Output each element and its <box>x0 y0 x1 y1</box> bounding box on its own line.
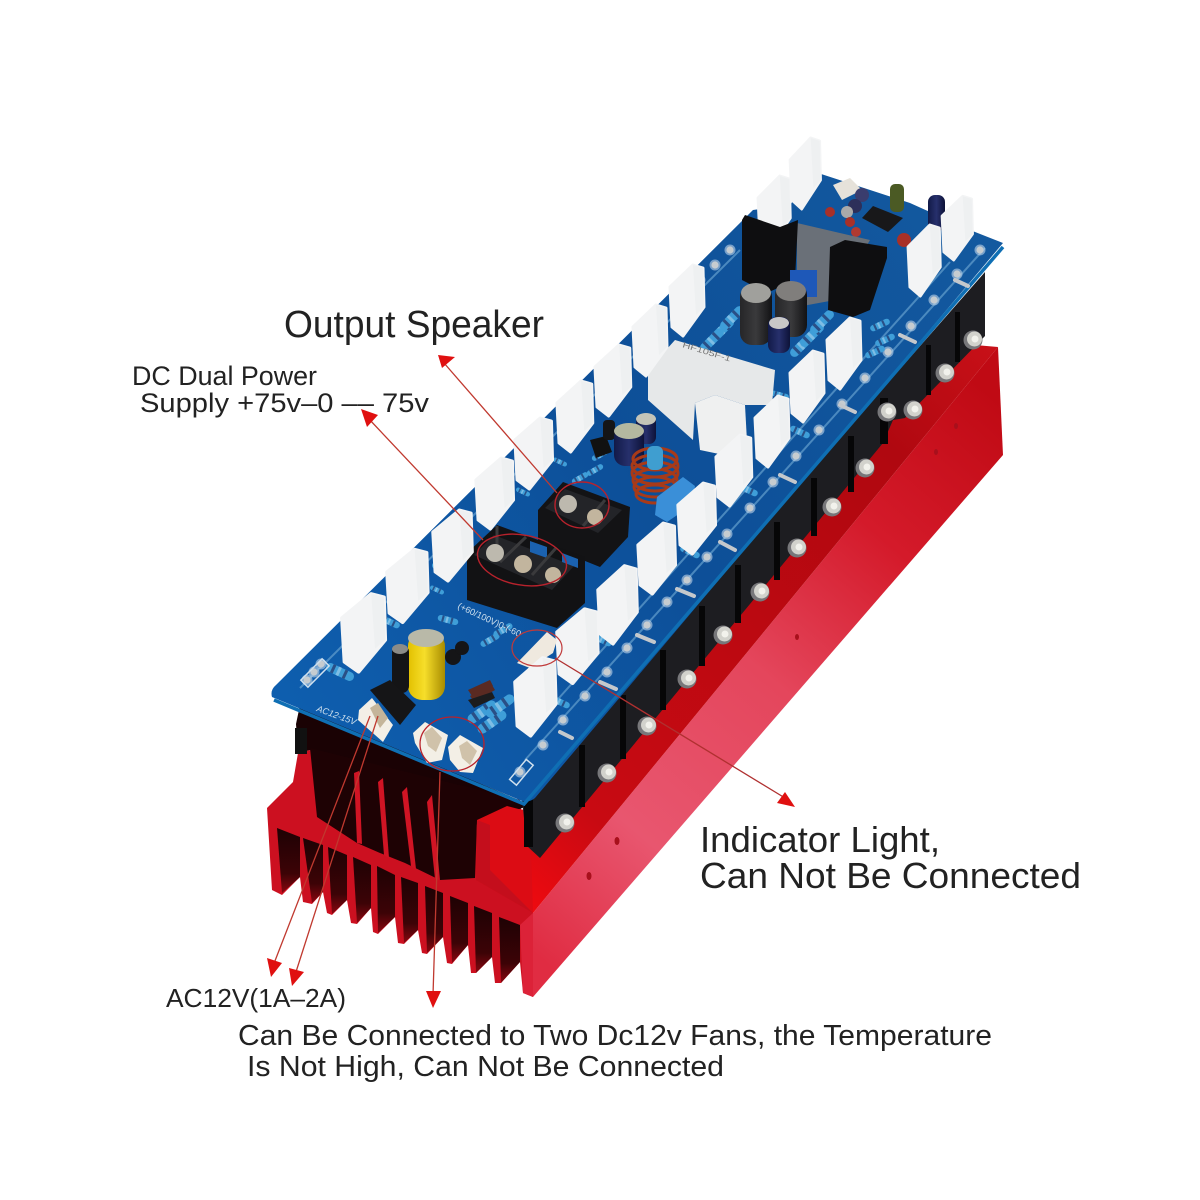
arrow: DC power <box>361 409 483 540</box>
circle: fan connectors <box>420 717 484 771</box>
small blue film capacitor <box>655 477 695 522</box>
small electrolytics near coil <box>636 414 656 444</box>
small board components <box>370 178 945 725</box>
arrow: fans <box>426 772 441 1008</box>
heatsink <box>267 345 1003 997</box>
relay: HF105F-1 <box>681 340 733 364</box>
label: DC dual power: Supply +75v–0 –– 75v <box>140 388 430 418</box>
label: output speaker: Output Speaker <box>284 304 544 346</box>
label: DC dual power <box>132 361 430 418</box>
blue electrolytic <box>928 195 945 231</box>
silver lead bars <box>560 280 968 738</box>
small back capacitors <box>855 188 869 202</box>
centre grey heatsink <box>797 223 870 307</box>
dark space under the board <box>296 705 530 825</box>
transistor dividers <box>524 312 960 847</box>
transistor screws <box>556 330 982 832</box>
heatsink side face <box>533 347 1003 997</box>
circle: rear terminal <box>555 482 609 528</box>
chip <box>862 206 903 232</box>
board outline <box>272 172 1003 802</box>
olive electrolytic <box>890 184 904 212</box>
transistor band <box>522 272 985 858</box>
regulator chip <box>370 680 416 725</box>
red beads <box>897 233 911 247</box>
lower fin slots <box>277 828 520 983</box>
black electrolytic 2 <box>775 283 807 337</box>
arrow: AC12V left <box>267 716 370 977</box>
diodes <box>468 680 493 696</box>
relay <box>648 340 775 460</box>
white film capacitors <box>342 196 973 683</box>
arrow: AC12V right <box>289 716 378 986</box>
black heatsink 2 <box>828 240 887 317</box>
arrow: indicator light <box>555 658 795 807</box>
black heatsink 1 <box>742 215 798 293</box>
front terminal block <box>467 525 585 628</box>
label: indicator light <box>700 819 1081 896</box>
white JST connector: fan 1 <box>413 722 448 763</box>
blue electrolytic 2 <box>768 317 790 353</box>
coil inductor <box>632 448 678 503</box>
circle: indicator connector <box>512 630 562 666</box>
label: indicator light: Can Not Be Connected <box>700 855 1081 896</box>
back connector <box>833 178 862 200</box>
power transistors row <box>522 272 985 858</box>
yellow capacitor <box>408 629 445 700</box>
label: AC12V: AC12V(1A–2A) <box>166 983 346 1013</box>
label: fans note: Can Be Connected to Two Dc12v Fans, the Temperature <box>238 1020 992 1052</box>
upper fins <box>354 771 440 880</box>
terminal blocks <box>467 482 630 628</box>
photo: amplifier board on red heatsink <box>267 138 1003 997</box>
label: fans note: Is Not High, Can Not Be Connected <box>247 1051 724 1083</box>
resistors <box>325 304 896 736</box>
left dark transistor tab <box>295 728 307 754</box>
blue trimmer <box>790 270 817 297</box>
annotation circles and arrows <box>267 355 795 1008</box>
white JST connector: fan 2 <box>448 735 483 773</box>
white JST connector: indicator <box>517 632 557 668</box>
silk traces along the edges <box>300 248 985 760</box>
transistors near yellow cap <box>445 649 461 665</box>
arrow: output speaker <box>438 355 557 493</box>
blue circuit board <box>272 138 1003 804</box>
board silk labels: AC12-15V <box>314 703 359 727</box>
board edge thickness <box>274 247 1003 804</box>
label: DC dual power: DC Dual Power <box>132 361 317 391</box>
label: indicator light: Indicator Light, <box>700 819 940 860</box>
small dark transistors near coil <box>590 436 612 458</box>
front film capacitor <box>515 658 556 736</box>
circle: front terminal block <box>473 528 571 592</box>
heatsink front face with teeth <box>267 745 533 997</box>
front right block of heatsink <box>476 806 533 913</box>
edge pads <box>302 244 986 778</box>
label: fans note <box>238 1020 992 1083</box>
black electrolytic 1 <box>740 285 772 345</box>
pad box outlines <box>301 659 533 785</box>
white JST connector: AC input <box>358 698 393 742</box>
rear film capacitors behind heatsinks <box>758 138 821 247</box>
heatsink top ledge <box>478 345 998 913</box>
rear terminal block <box>538 482 630 567</box>
block face <box>476 820 533 913</box>
small black capacitor <box>392 645 409 693</box>
heatsink upper fin cavity <box>310 748 520 880</box>
blue circuit board: (+60/100V)0-(-60 <box>456 601 523 639</box>
heatsink mounting holes <box>586 423 958 880</box>
corner front highlight <box>520 913 533 997</box>
coil centre resistor <box>647 446 663 470</box>
